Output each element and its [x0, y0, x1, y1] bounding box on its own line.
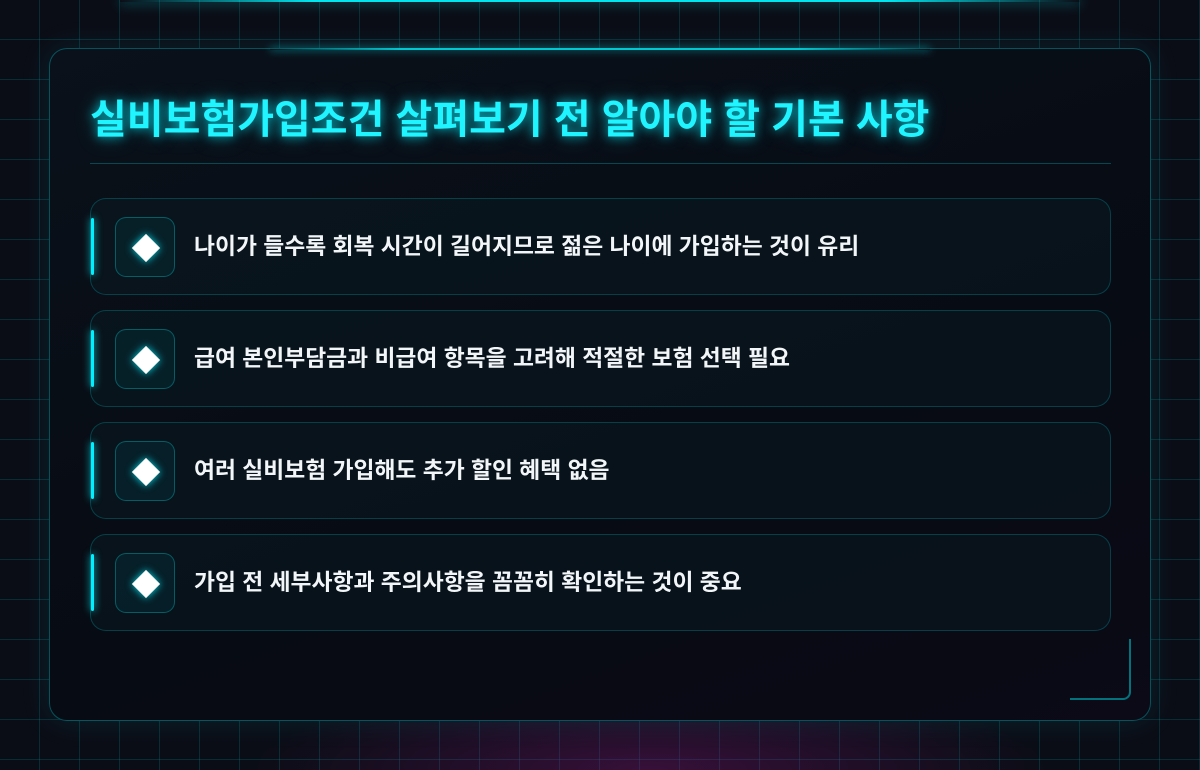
item 4: [90, 534, 1111, 631]
item 1: [90, 198, 1111, 295]
corner bracket: [1070, 639, 1131, 700]
icon: diamond: [115, 441, 175, 501]
text 1: 나이가 들수록 회복 시간이 길어지므로 젊은 나이에 가입하는 것이 유리: [194, 233, 859, 259]
text 3: 여러 실비보험 가입해도 추가 할인 혜택 없음: [194, 457, 610, 483]
icon: diamond: [115, 553, 175, 613]
text 4: 가입 전 세부사항과 주의사항을 꼼꼼히 확인하는 것이 중요: [194, 569, 742, 595]
icon: diamond: [115, 329, 175, 389]
item 3: [90, 422, 1111, 519]
text 2: 급여 본인부담금과 비급여 항목을 고려해 적절한 보험 선택 필요: [194, 345, 790, 371]
item 2: [90, 310, 1111, 407]
icon: diamond: [115, 217, 175, 277]
title: 실비보험가입조건 살펴보기 전 알아야 할 기본 사항: [90, 98, 929, 142]
